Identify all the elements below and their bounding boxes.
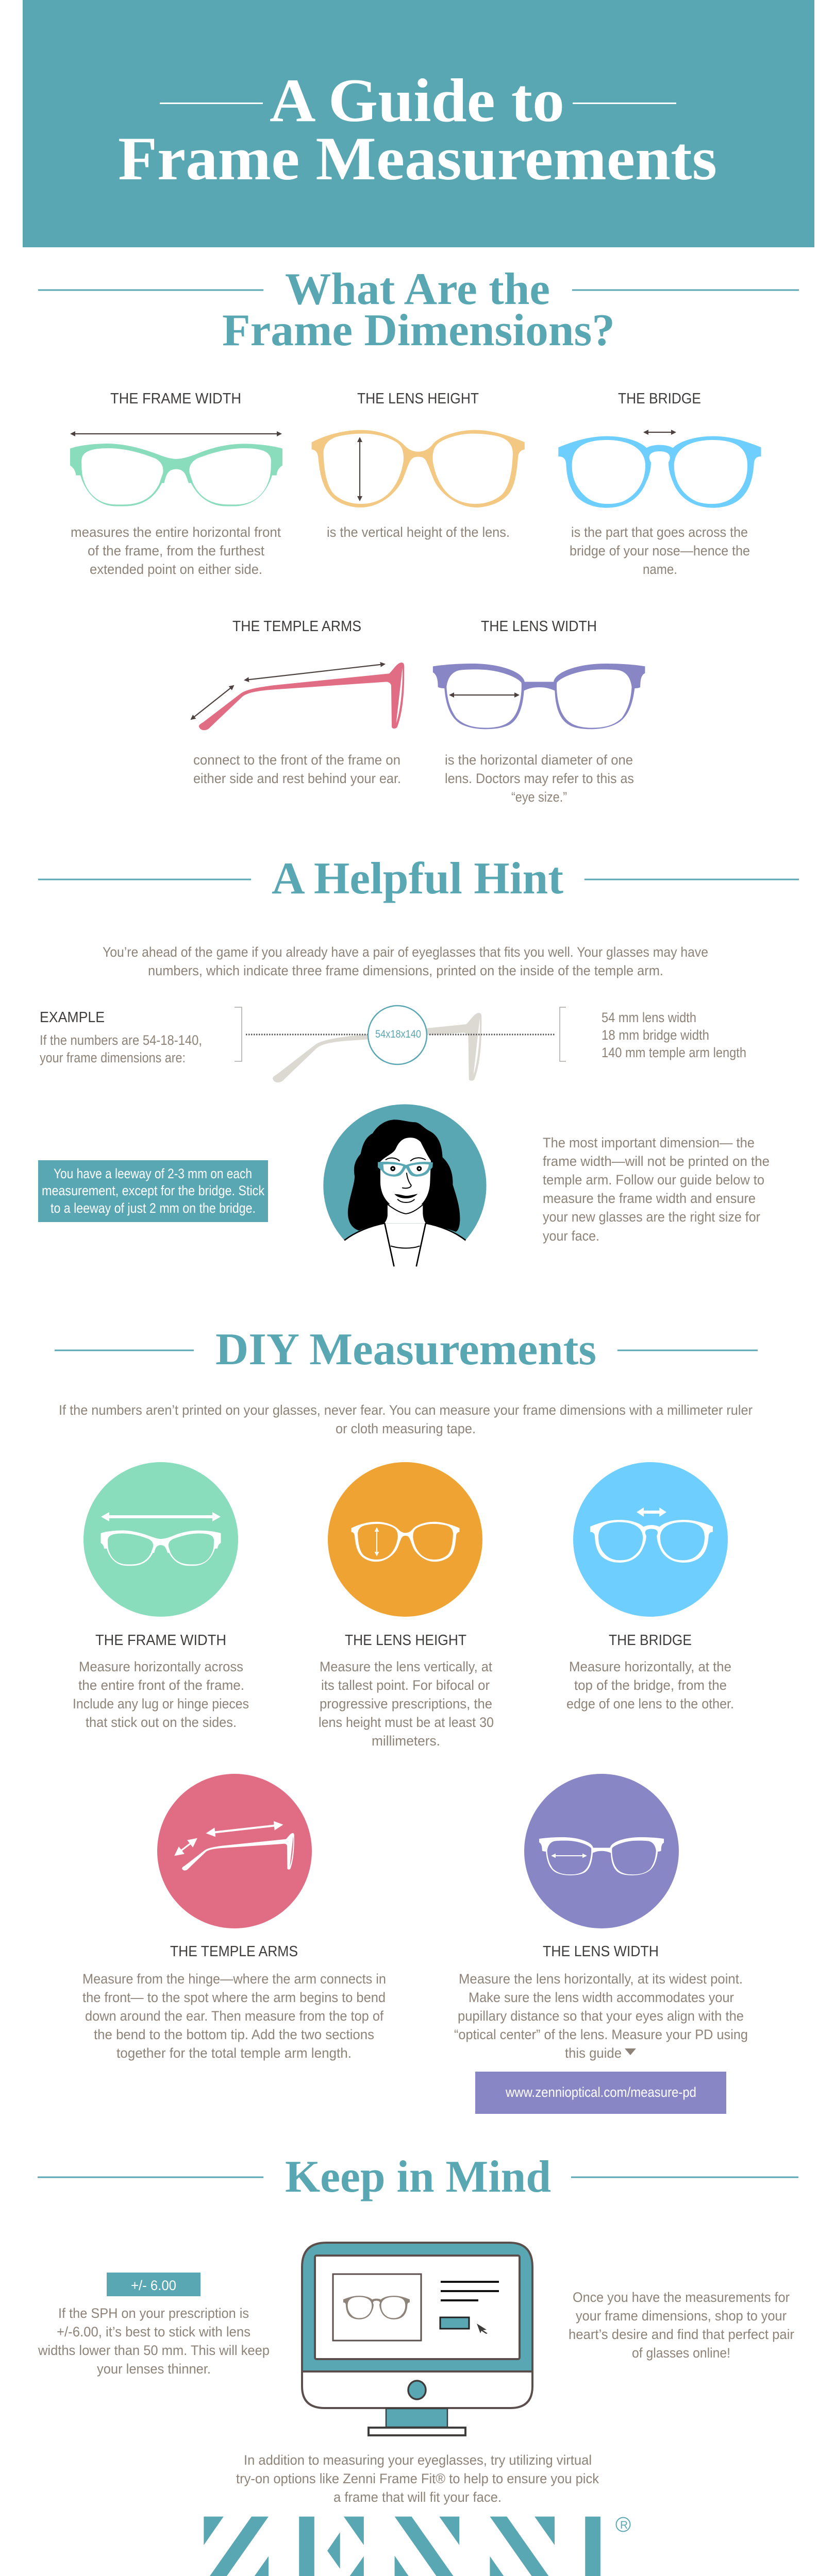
text: shop online: your frame dimensions, shop to your [576,2308,787,2324]
text: shop online [569,2290,794,2361]
text: temple arms instructions: down around the ear. Then measure from the top of [85,2008,384,2024]
logo: zenni: R [620,2519,628,2531]
text: lens height instructions: millimeters. [372,1733,440,1749]
heading: keep in mind: Keep in Mind [285,2152,551,2202]
text: lens width description: is the horizontal diameter of one [445,752,633,768]
text: bridge description: name. [643,562,677,577]
text: temple arms instructions: together for the total temple arm length. [116,2045,352,2061]
text: sph advice: If the SPH on your prescription is [58,2306,249,2321]
panel: the lens width [433,618,645,805]
icon: blue glasses with bridge arrow [558,432,761,508]
text: dimension list: 18 mm bridge width [602,1027,709,1043]
text: frame width instructions: Include any lug or hinge pieces [73,1696,249,1711]
text: sph advice: your lenses thinner. [97,2361,211,2377]
text: lens height instructions: its tallest point. For bifocal or [321,1677,490,1693]
text: diy intro [59,1402,753,1436]
text: example: If the numbers are 54-18-140, [40,1032,202,1048]
callout: leeway: You have a leeway of 2-3 mm on each [54,1166,252,1181]
text: lens width instructions [454,1971,748,2061]
text: temple arms instructions: the front— to the spot where the arm begins to bend [82,1990,386,2005]
text: frame width instructions: the entire front of the frame. [78,1677,244,1693]
text: most important dimension [543,1135,770,1244]
section: diy measurements [55,1325,758,2114]
panel: measure lens height [319,1462,494,1749]
callout: leeway: measurement, except for the bridge. Stick [42,1183,265,1198]
text: frame width description [71,524,281,577]
text: lens height description: is the vertical height of the lens. [327,524,510,540]
text: lens height instructions: progressive prescriptions, the [320,1696,492,1711]
text: lens width instructions: pupillary distance so that your eyes align with the [458,2008,744,2024]
text: lens width instructions: “optical center” of the lens. Measure your PD using [454,2027,748,2042]
panel: the lens height [312,391,525,540]
text: most important dimension: The most important dimension— the [543,1135,755,1150]
icon: lens height circle [328,1462,482,1617]
text: lens width description: lens. Doctors may refer to this as [445,771,634,786]
text: bridge instructions: Measure horizontally, at the [569,1659,731,1674]
text: frame width description: measures the entire horizontal front [71,524,281,540]
text: sph advice [38,2306,270,2377]
tag: sph value [107,2273,201,2296]
section: a helpful hint [38,854,799,1278]
text: most important dimension: your face. [543,1228,599,1244]
tag: sph value: +/- 6.00 [131,2278,176,2293]
text: diy intro: If the numbers aren’t printed on your glasses, never fear. You can measure your frame dimensions with a millimeter ruler [59,1402,753,1418]
text: hint intro [103,944,708,978]
illustration: woman with glasses [320,1104,491,1278]
section: what are the frame dimensions [38,264,799,805]
text: sph advice: widths lower than 50 mm. This will keep [38,2343,270,2358]
text: sph advice: +/-6.00, it’s best to stick with lens [57,2324,250,2340]
icon: bridge circle [573,1462,728,1617]
text: lens width description [445,752,634,805]
heading: what are the frame dimensions: Frame Dimensions? [222,306,615,355]
text: most important dimension: temple arm. Follow our guide below to [543,1172,764,1188]
text: lens width instructions: this guide [565,2045,622,2061]
panel: measure frame width: THE FRAME WIDTH [95,1632,226,1649]
panel: measure lens height: THE LENS HEIGHT [345,1632,466,1649]
panel: the bridge [558,391,761,577]
text: bridge description: bridge of your nose—hence the [570,543,750,558]
icon: temple arms circle [157,1774,312,1928]
panel: the lens height: THE LENS HEIGHT [357,391,479,407]
text: bridge instructions [566,1659,734,1711]
text: bridge instructions: top of the bridge, from the [574,1677,727,1693]
text: example: your frame dimensions are: [40,1050,186,1065]
icon: purple glasses with lens width arrow [433,664,645,729]
panel: measure lens width: THE LENS WIDTH [543,1943,659,1960]
text: shop online: Once you have the measurements for [573,2290,790,2305]
button: measure pd link: www.zennioptical.com/measure-pd [505,2084,696,2100]
text: most important dimension: your new glasses are the right size for [543,1209,760,1225]
text: lens width instructions: Measure the lens horizontally, at its widest point. [459,1971,743,1987]
text: example [40,1009,202,1065]
text: lens height instructions [319,1659,494,1749]
text: virtual try-on: In addition to measuring your eyeglasses, try utilizing virtual [244,2452,592,2468]
text: lens width instructions: Make sure the lens width accommodates your [469,1990,734,2005]
panel: the temple arms [191,618,404,786]
text: temple arms description [193,752,401,786]
text: temple arms instructions: Measure from the hinge—where the arm connects in [82,1971,386,1987]
text: diy intro: or cloth measuring tape. [336,1421,476,1436]
text: lens height instructions: Measure the lens vertically, at [320,1659,493,1674]
panel: the lens width: THE LENS WIDTH [481,618,597,635]
icon: pink temple arm with arrows [191,663,404,730]
icon: lens width circle [524,1774,679,1928]
diagram: temple arm with printed numbers: 54x18x140 [375,1028,421,1040]
text: temple arms instructions: the bend to the bottom tip. Add the two sections [94,2027,374,2042]
text: example: EXAMPLE [40,1009,105,1026]
icon: yellow glasses with height arrow [312,430,525,507]
panel: measure temple arms [82,1774,386,2061]
heading: what are the frame dimensions: What Are the [285,264,550,314]
panel: the temple arms: THE TEMPLE ARMS [232,618,361,635]
text: bridge description: is the part that goes across the [571,524,748,540]
section: keep in mind [38,2152,798,2505]
text: temple arms description: either side and rest behind your ear. [193,771,401,786]
text: dimension list: 140 mm temple arm length [602,1045,746,1060]
icon: mint glasses with width arrow [70,434,282,506]
text: most important dimension: measure the frame width and ensure [543,1191,756,1206]
callout: leeway [38,1160,268,1222]
panel: the bridge: THE BRIDGE [618,391,701,407]
panel: the frame width [70,391,282,577]
text: frame width instructions: that stick out on the sides. [86,1715,237,1730]
text: virtual try-on: try-on options like Zenni Frame Fit® to help to ensure you pick [236,2471,599,2486]
title banner [23,0,814,247]
text: temple arms instructions [82,1971,386,2061]
text: virtual try-on: a frame that will fit your face. [333,2489,502,2505]
text: dimension list [602,1010,746,1060]
text: hint intro: numbers, which indicate three frame dimensions, printed on the inside of the temple arm. [148,963,663,978]
heading: diy measurements: DIY Measurements [215,1325,596,1375]
text: bridge description [570,524,750,577]
button: measure pd link [475,2072,726,2114]
illustration: desktop monitor [302,2243,532,2435]
text: bridge instructions: edge of one lens to the other. [566,1696,734,1711]
callout: leeway: to a leeway of just 2 mm on the bridge. [51,1200,256,1216]
text: temple arms description: connect to the front of the frame on [193,752,400,768]
text: dimension list: 54 mm lens width [602,1010,696,1025]
panel: measure bridge [566,1462,734,1711]
text: lens width description: “eye size.” [511,789,567,805]
panel: measure lens width [454,1774,748,2114]
panel: the frame width: THE FRAME WIDTH [110,391,241,407]
text: frame width description: of the frame, from the furthest [88,543,265,558]
icon: frame width circle [84,1462,238,1617]
diagram: temple arm with printed numbers [235,1006,566,1082]
text: shop online: heart’s desire and find that perfect pair [569,2327,794,2342]
text: hint intro: You’re ahead of the game if you already have a pair of eyeglasses that fits you well. Your glasses may have [103,944,708,960]
panel: measure frame width [73,1462,249,1730]
text: most important dimension: frame width—will not be printed on the [543,1154,770,1169]
heading: a helpful hint: A Helpful Hint [272,854,563,904]
title banner: Frame Measurements [118,124,717,193]
text: frame width description: extended point on either side. [90,562,262,577]
panel: measure temple arms: THE TEMPLE ARMS [170,1943,298,1960]
panel: measure bridge: THE BRIDGE [609,1632,692,1649]
logo: zenni [204,2517,630,2576]
text: lens height instructions: lens height must be at least 30 [319,1715,494,1730]
title banner: A Guide to [270,66,564,134]
heading: what are the frame dimensions [38,264,799,355]
text: frame width instructions: Measure horizontally across [79,1659,243,1674]
text: frame width instructions [73,1659,249,1730]
text: virtual try-on [236,2452,599,2505]
text: shop online: of glasses online! [632,2345,730,2361]
